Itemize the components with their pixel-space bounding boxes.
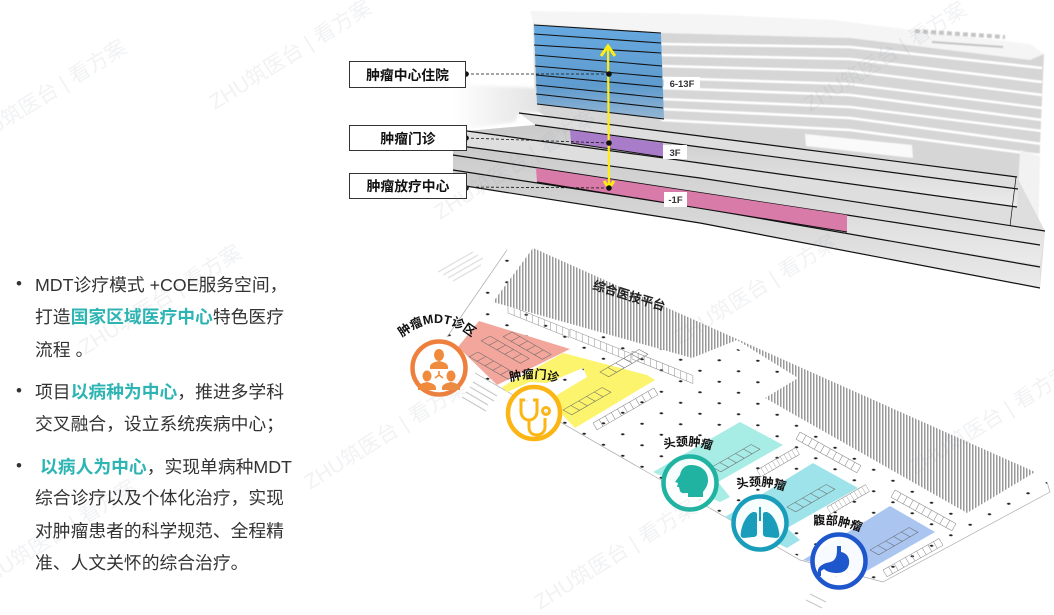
podium floors bbox=[453, 113, 1045, 288]
leader dots bbox=[463, 71, 612, 191]
label: inpatient: 肿瘤中心住院 bbox=[366, 67, 449, 83]
hatched medical technology platform bbox=[493, 248, 1035, 513]
salmon zone bbox=[458, 321, 570, 385]
watermarks: ZHU筑医台 | 看方案 bbox=[670, 231, 841, 349]
text block: bullet 1: MDT诊疗模式 +COE服务空间， bbox=[35, 275, 287, 295]
teal zone: head and neck bbox=[653, 422, 783, 502]
text block: bullet 3: • bbox=[16, 456, 22, 475]
watermarks: ZHU筑医台 | 看方案 bbox=[300, 376, 471, 494]
floor tag -1F: -1F bbox=[668, 195, 683, 206]
floor tag 6-13F bbox=[664, 77, 700, 90]
floor plan bbox=[396, 248, 1050, 608]
label: outpatient: 肿瘤门诊 bbox=[380, 130, 436, 146]
watermarks: ZHU筑医台 | 看方案 bbox=[800, 0, 971, 116]
vertical yellow arrow bbox=[601, 46, 615, 188]
hospital sign bbox=[915, 31, 1005, 47]
blue inpatient floors 6-13F bbox=[534, 25, 664, 119]
watermarks: ZHU筑医台 | 看方案 bbox=[75, 241, 246, 359]
floor tag 3F bbox=[663, 145, 687, 159]
icon: stethoscope bbox=[508, 387, 560, 439]
label: radiotherapy: 肿瘤放疗中心 bbox=[367, 178, 450, 194]
tower body bbox=[530, 11, 1044, 235]
podium left fade bbox=[453, 84, 540, 130]
left drawing annotations bbox=[462, 382, 826, 608]
platform label: 综合医技平台 bbox=[591, 277, 667, 314]
text block: bullet 2: • bbox=[16, 381, 22, 400]
text block: bullet 1: 流程 。 bbox=[35, 340, 93, 360]
dashed leaders bbox=[466, 74, 609, 188]
cyan zone: thoracic bbox=[725, 463, 858, 548]
floor tag 3F: 3F bbox=[669, 148, 681, 159]
yellow zone bbox=[502, 353, 655, 428]
label: inpatient bbox=[350, 62, 466, 88]
text block: bullet 2: 项目以病种为中心，推进多学科 bbox=[35, 382, 284, 402]
text block: bullet 2: 交叉融合，设立系统疾病中心； bbox=[35, 414, 284, 434]
zone label: MDT: 肿瘤MDT诊区 bbox=[396, 314, 478, 338]
icon: stomach bbox=[812, 534, 866, 588]
purple outpatient floor 3F bbox=[570, 130, 663, 157]
blue zone: abdominal bbox=[803, 506, 935, 573]
icon: lungs bbox=[734, 496, 786, 550]
floor lines bbox=[453, 113, 1045, 288]
text block: bullet 3: 准、人文关怀的综合治疗。 bbox=[35, 553, 248, 573]
label: outpatient bbox=[350, 126, 466, 150]
icon: head bbox=[664, 456, 716, 510]
building section bbox=[350, 11, 1045, 288]
text block: bullet 1: 打造国家区域医疗中心特色医疗 bbox=[35, 307, 284, 327]
zone label: second tumour group: 头颈肿瘤 bbox=[737, 476, 787, 492]
label: radiotherapy bbox=[350, 174, 466, 198]
floor tag -1F bbox=[664, 192, 687, 207]
watermarks: ZHU筑医台 | 看方案 bbox=[430, 106, 601, 224]
watermarks: ZHU筑医台 | 看方案 bbox=[530, 496, 701, 614]
text block: bullet 1 bbox=[16, 274, 287, 360]
icon: MDT team bbox=[412, 342, 466, 394]
text block: bullet 3: 对肿瘤患者的科学规范、全程精 bbox=[35, 521, 284, 541]
faint parking grid bbox=[438, 252, 483, 281]
pink radiotherapy floor -1F bbox=[536, 168, 847, 232]
text block: bullet 3 bbox=[16, 456, 292, 573]
text block: bullet 2 bbox=[16, 381, 284, 434]
zone label: head and neck: 头颈肿瘤 bbox=[664, 436, 714, 450]
text block: bullet 3: 综合诊疗以及个体化治疗，实现 bbox=[35, 488, 284, 508]
text block: bullet 1: • bbox=[16, 274, 22, 293]
text block: bullet 3: 以病人为中心，实现单病种MDT bbox=[40, 457, 292, 477]
floor tag 6-13F: 6-13F bbox=[670, 79, 695, 90]
room lines bbox=[469, 305, 956, 577]
plan outline and column grid bbox=[447, 250, 1050, 585]
zone label: abdominal: 腹部肿瘤 bbox=[814, 514, 864, 532]
zone label: outpatient: 肿瘤门诊 bbox=[509, 368, 560, 382]
